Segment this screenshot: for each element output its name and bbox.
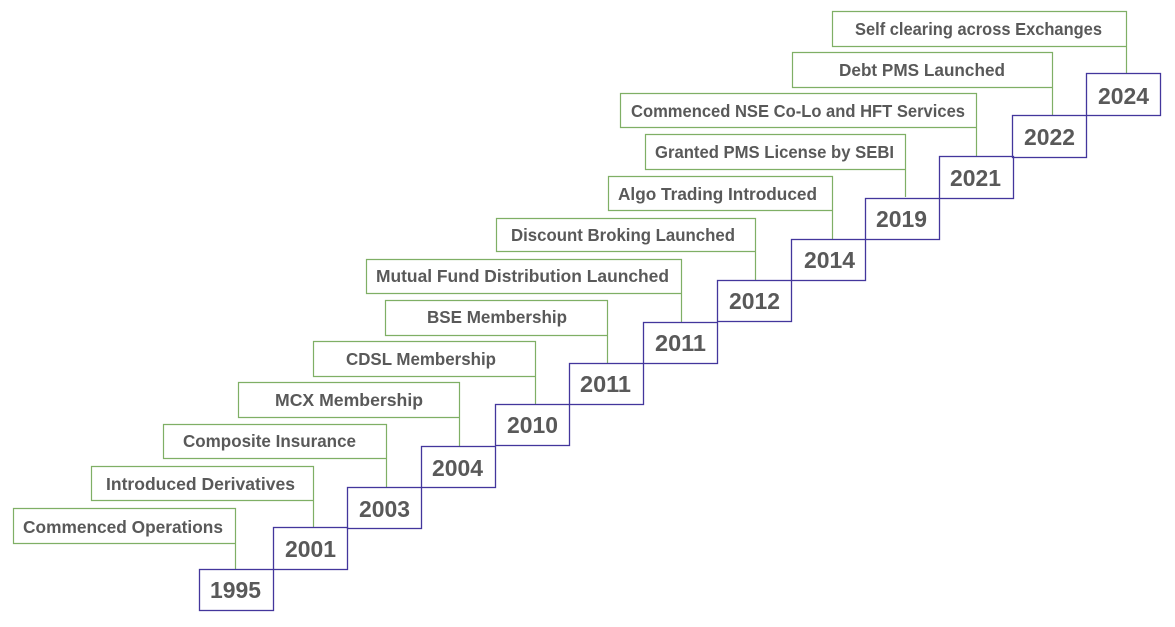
- year step: 2004: [422, 446, 496, 488]
- year step: 2011: [644, 322, 718, 364]
- milestone: 1995 Commenced Operations: [14, 508, 236, 569]
- milestone: 2010 CDSL Membership: CDSL Membership: [346, 349, 496, 369]
- milestone: 2011 Mutual Fund Distribution Launched: Mutual Fund Distribution Launched: [376, 266, 669, 286]
- year step: 2003: 2003: [359, 496, 410, 522]
- milestone: 2004 MCX Membership: MCX Membership: [275, 390, 423, 410]
- milestone: 2010 CDSL Membership: [314, 342, 536, 404]
- milestone: 2021 Commenced NSE Co-Lo and HFT Services: Commenced NSE Co-Lo and HFT Services: [631, 101, 965, 121]
- year step: 2024: 2024: [1098, 83, 1149, 109]
- year step: 2024: [1086, 74, 1160, 116]
- milestone: 2022 Debt PMS Launched: Debt PMS Launched: [839, 60, 1005, 80]
- year step: 2001: 2001: [285, 536, 336, 562]
- year step: 1995: [200, 570, 274, 610]
- milestone: 2024 Self clearing across Exchanges: Self clearing across Exchanges: [855, 19, 1102, 39]
- milestone: 2019 Granted PMS License by SEBI: Granted PMS License by SEBI: [655, 142, 894, 162]
- year step: 2022: [1012, 116, 1086, 158]
- milestone: 2019 Granted PMS License by SEBI: [646, 134, 906, 197]
- year step: 2021: [940, 156, 1014, 198]
- year step: 2014: 2014: [804, 247, 855, 273]
- year step: 2003: [348, 488, 422, 528]
- year step: 2021: 2021: [950, 165, 1001, 191]
- milestone: 2003 Composite Insurance: Composite Insurance: [183, 431, 356, 451]
- year step: 2011: [570, 364, 644, 404]
- milestone: 2011 BSE Membership: [386, 300, 608, 363]
- milestone: 2004 MCX Membership: [238, 382, 460, 446]
- milestone: 2022 Debt PMS Launched: [792, 52, 1052, 115]
- year step: 2012: 2012: [729, 288, 780, 314]
- milestone: 2011 BSE Membership: BSE Membership: [427, 307, 567, 327]
- milestone: 2014 Algo Trading Introduced: [608, 176, 832, 239]
- milestone: 2001 Introduced Derivatives: [92, 466, 314, 527]
- year step: 2004: 2004: [432, 455, 483, 481]
- milestone: 2012 Discount Broking Launched: [496, 218, 756, 280]
- milestone: 2011 Mutual Fund Distribution Launched: [366, 260, 682, 322]
- year step: 2019: [866, 198, 940, 240]
- milestone: 2001 Introduced Derivatives: Introduced Derivatives: [106, 474, 295, 494]
- year step: 2012: [718, 280, 792, 322]
- milestone: 2003 Composite Insurance: [164, 424, 386, 487]
- year step: 2010: 2010: [507, 412, 558, 438]
- milestone: 2021 Commenced NSE Co-Lo and HFT Services: [620, 94, 976, 156]
- year step: 2022: 2022: [1024, 124, 1075, 150]
- year step: 2019: 2019: [876, 206, 927, 232]
- year step: 2010: [496, 404, 570, 446]
- milestone: 2014 Algo Trading Introduced: Algo Trading Introduced: [618, 184, 817, 204]
- milestone: 1995 Commenced Operations: Commenced Operations: [23, 517, 223, 537]
- year step: 1995: 1995: [210, 577, 261, 603]
- year step: 2011: 2011: [580, 371, 631, 397]
- milestone: 2012 Discount Broking Launched: Discount Broking Launched: [511, 225, 735, 245]
- year step: 2014: [792, 240, 866, 280]
- milestone: 2024 Self clearing across Exchanges: [832, 12, 1126, 73]
- year step: 2011: 2011: [655, 330, 706, 356]
- year step: 2001: [274, 528, 348, 570]
